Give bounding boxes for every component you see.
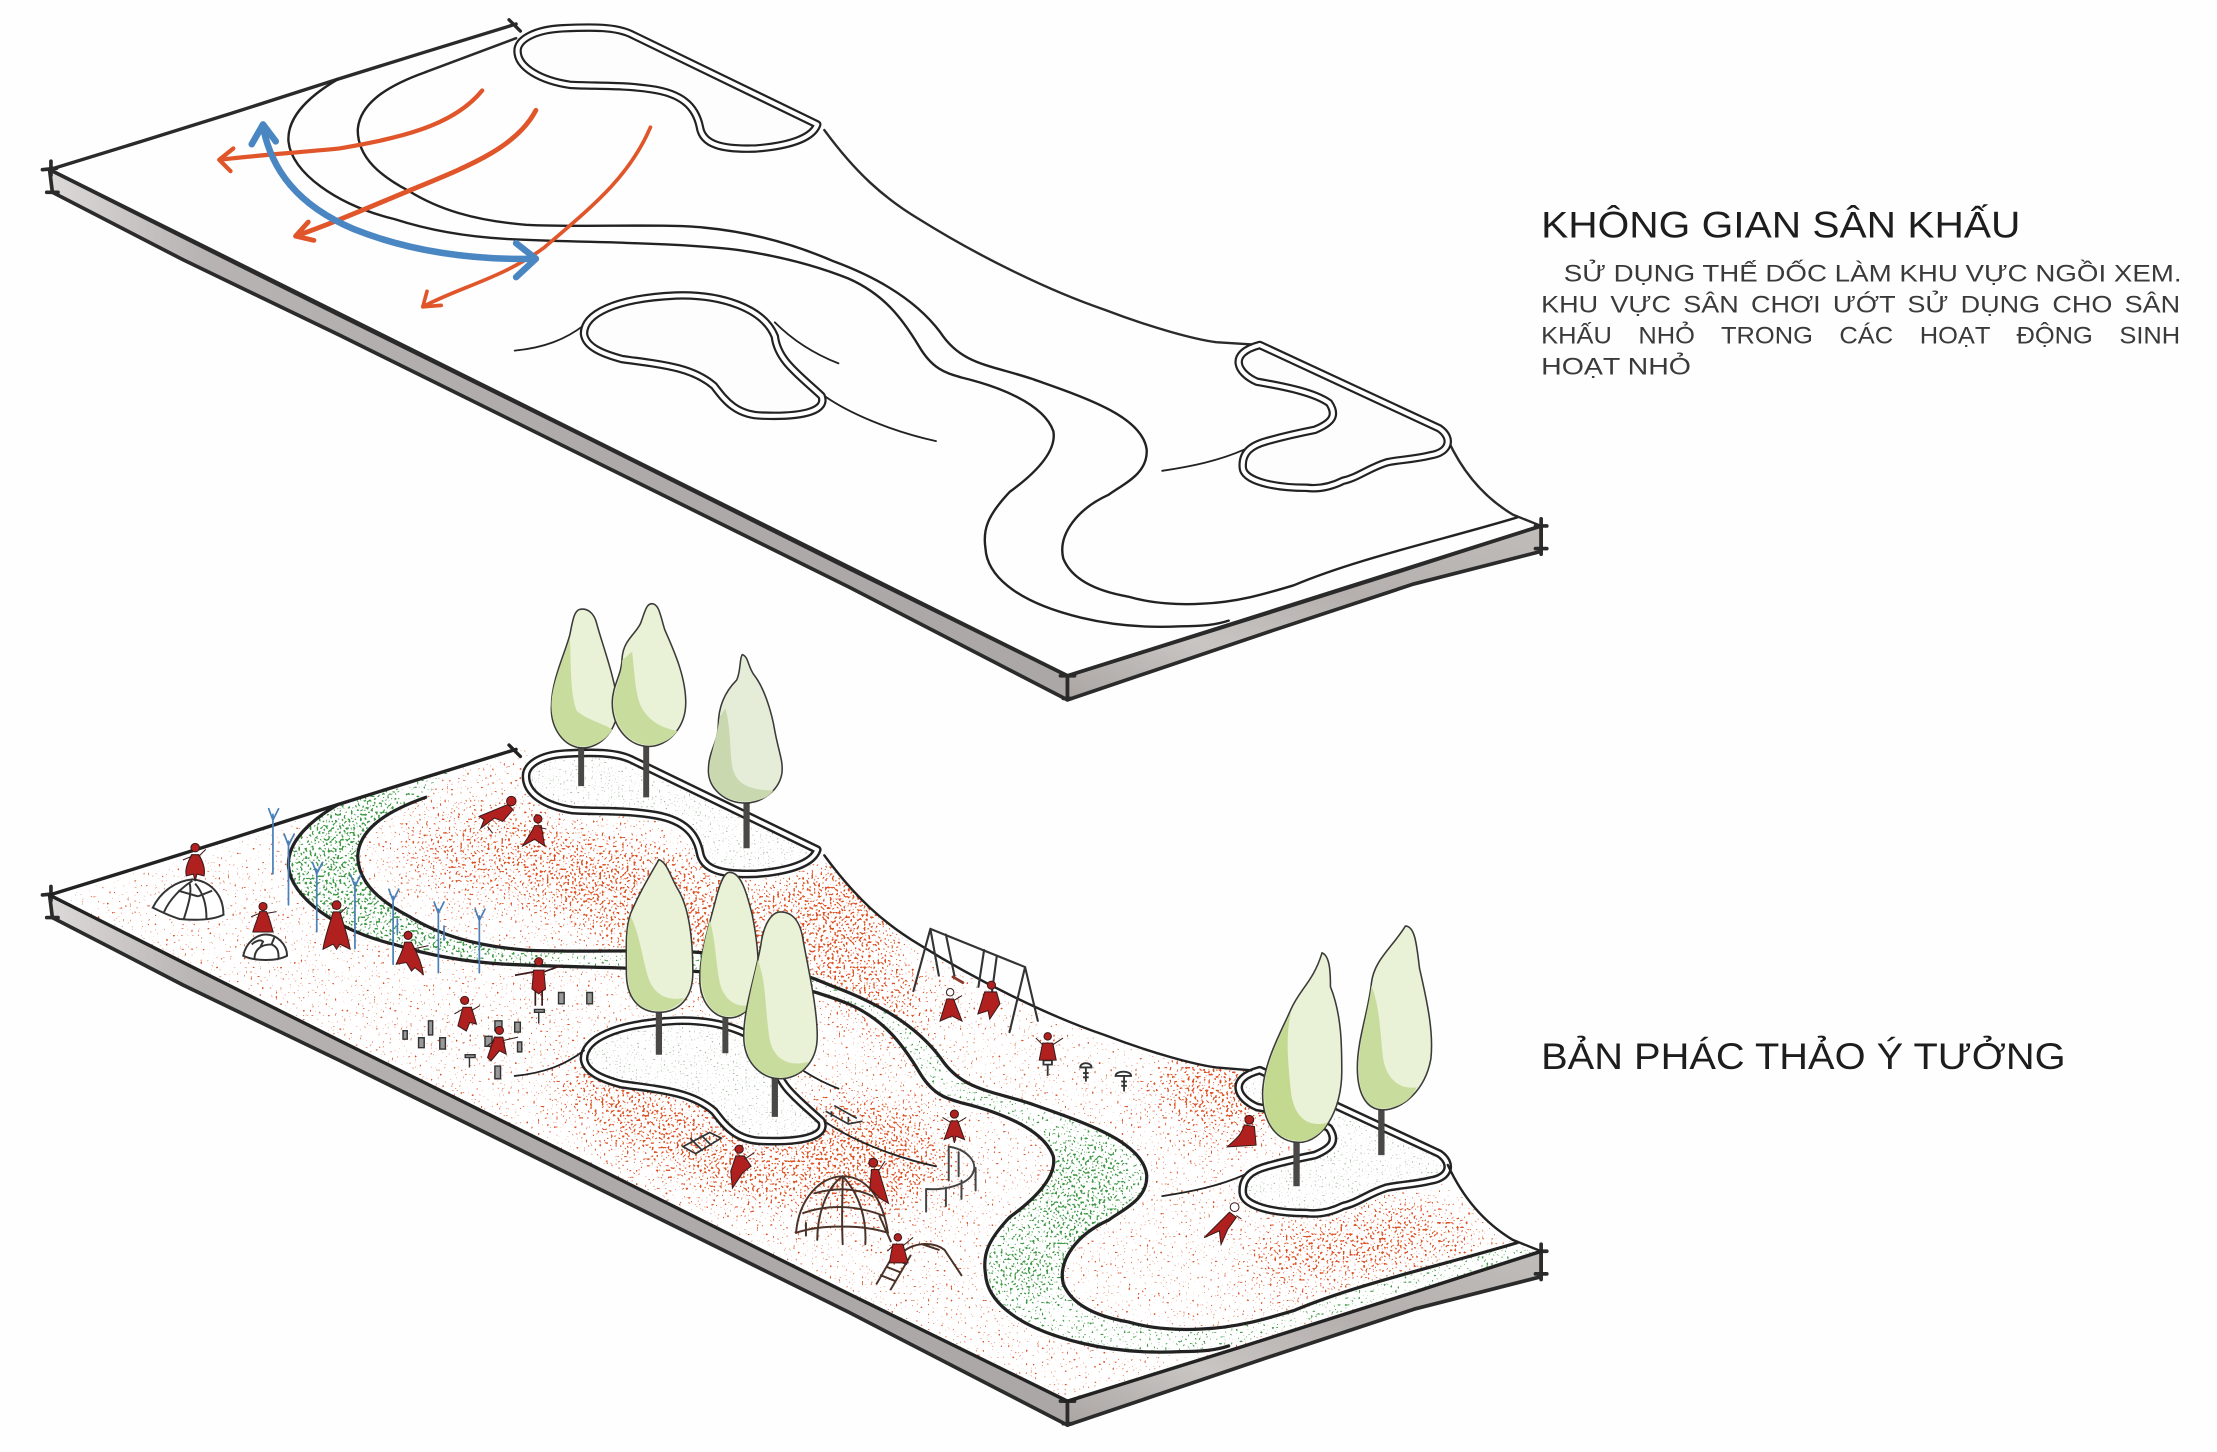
people: red figures	[183, 796, 1256, 1263]
icon: ladder and arch	[877, 1244, 961, 1289]
figure path	[943, 1110, 966, 1143]
icon: grid climbing dome	[796, 1176, 891, 1244]
green planting stipple	[290, 772, 1534, 1350]
panel: stage space sketch (top isometric)	[42, 20, 1547, 700]
text block: description: HOẠT NHỎ	[1541, 352, 1691, 381]
arrow: blue two-way arc	[252, 124, 536, 277]
tree: mid 2	[700, 872, 758, 1053]
icon: stepping stumps	[403, 993, 592, 1079]
arrow: orange flow 3	[423, 127, 650, 307]
text block: description: KHU VỰC SÂN CHƠI ƯỚT SỬ DỤNG CHO SÂN	[1541, 289, 2180, 318]
planters with stipple	[526, 753, 1448, 1214]
figure arms wide	[515, 958, 562, 1006]
icon: swing set	[913, 929, 1038, 1032]
planters	[518, 28, 1448, 488]
icon: blue reeds	[269, 809, 485, 973]
figure stumps 2	[488, 1026, 518, 1061]
figure ladder arch	[888, 1234, 913, 1263]
figure swing 2	[978, 981, 1000, 1019]
text block: description	[1541, 258, 2182, 381]
plane outline and terrace curves	[50, 745, 1541, 1401]
figure sliding right	[1204, 1203, 1241, 1244]
text block: description: SỬ DỤNG THẾ DỐC LÀM KHU VỰC NGỒI XEM.	[1564, 258, 2182, 287]
tree: right 1	[1263, 953, 1342, 1186]
orange gravel stipple	[58, 750, 1515, 1400]
text block: description: KHẤU NHỎ TRONG CÁC HOẠT ĐỘNG SINH	[1541, 321, 2180, 350]
tree: hill 1	[551, 609, 618, 786]
figure dome front	[731, 1145, 754, 1188]
figure sitting right	[1227, 1115, 1256, 1147]
figure swing 1	[940, 988, 962, 1021]
arrow: orange flow 1	[219, 90, 482, 171]
figure climbing dome	[869, 1158, 889, 1203]
heading: stage space: KHÔNG GIAN SÂN KHẤU	[1541, 205, 2020, 246]
icon: small dome middle	[243, 935, 287, 960]
tree: hill 2	[612, 604, 686, 797]
figure slope 2	[523, 815, 546, 846]
figure tall	[323, 901, 350, 949]
figure spring rider	[1036, 1033, 1063, 1060]
tree: hill 3	[708, 655, 782, 848]
figure on left dome	[183, 843, 206, 881]
slab side faces	[42, 886, 1547, 1425]
figure reeds	[396, 931, 428, 974]
icon: sled	[826, 1106, 862, 1124]
slab side faces	[42, 161, 1547, 700]
planting band white base	[292, 775, 1522, 1350]
icon: curved climbing frame	[926, 1147, 976, 1212]
plane outline	[50, 20, 1541, 676]
figure slope 1	[479, 796, 516, 833]
figure stumps 1	[454, 996, 480, 1031]
icon: spring riders	[1043, 1060, 1131, 1091]
figure on middle dome	[251, 902, 277, 932]
heading: concept sketch: BẢN PHÁC THẢO Ý TƯỞNG	[1541, 1035, 2066, 1077]
panel: concept sketch (bottom isometric)	[40, 743, 1549, 1427]
arrow: orange flow 2	[296, 110, 536, 240]
terrace curves	[288, 72, 1517, 627]
tree: mid 3	[744, 912, 817, 1117]
tree: mid 1	[626, 860, 693, 1055]
icon: small ladder	[683, 1132, 721, 1154]
icon: small dome left	[153, 879, 223, 920]
ground plane base	[50, 749, 1541, 1401]
tree: right 2	[1357, 926, 1432, 1155]
